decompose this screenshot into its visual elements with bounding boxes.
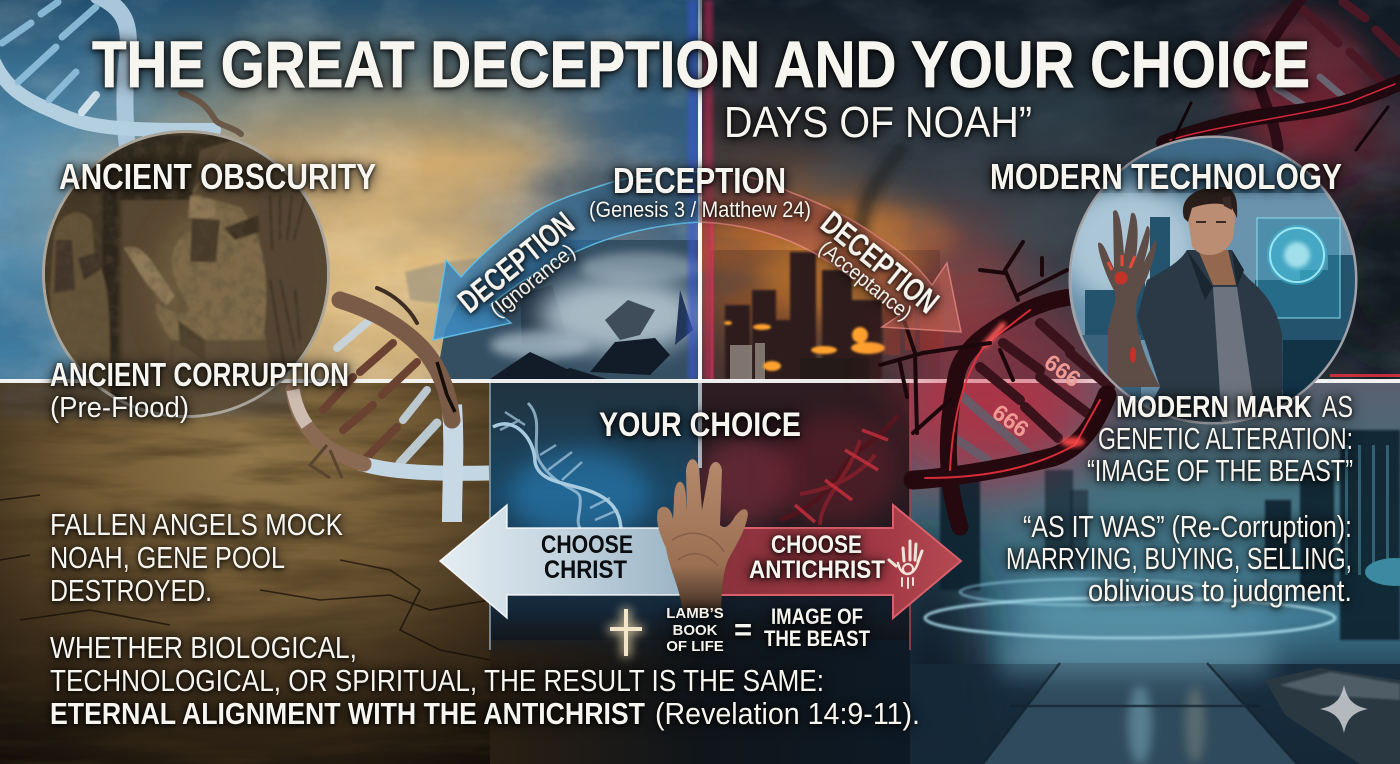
center vertical divider — [688, 0, 713, 380]
heading: deception: DECEPTION — [613, 160, 786, 201]
floor — [910, 664, 1400, 764]
smoke plume — [862, 145, 905, 232]
red DNA 666 labels: 666 — [1040, 349, 1086, 392]
icon: sparkle — [1320, 685, 1368, 733]
text: eternal alignment — [50, 630, 920, 731]
text: fallen angels: NOAH, GENE POOL — [50, 540, 285, 575]
text: eternal alignment: (Revelation 14:9-11). — [655, 696, 920, 731]
icon: cross — [608, 608, 643, 657]
label: deception: DECEPTION — [451, 205, 581, 320]
heading: your choice: YOUR CHOICE — [599, 406, 801, 444]
text: modern mark: MODERN MARK — [1116, 389, 1312, 424]
text: modern mark — [1087, 389, 1353, 488]
arrow: deception ignorance — [433, 172, 700, 340]
label: choose christ: CHOOSE — [541, 531, 633, 559]
horizontal divider — [0, 374, 1400, 383]
shirt — [1213, 287, 1253, 422]
thorned red DNA top right — [1164, 0, 1400, 150]
label: choose christ: CHRIST — [544, 556, 627, 584]
text: eternal alignment: TECHNOLOGICAL, OR SPIRITUAL, THE RESULT IS THE SAME: — [50, 663, 824, 698]
bottom center backdrop — [490, 640, 910, 764]
equals sign: = — [734, 612, 752, 647]
background: desert quadrant — [0, 380, 490, 764]
label: lamb's book of life: LAMB’S — [666, 605, 724, 622]
strand B — [948, 297, 1072, 527]
label: acceptance: (Acceptance) — [814, 237, 916, 325]
rungs — [980, 323, 1110, 438]
scripture reference: (Genesis 3 / Matthew 24) — [589, 197, 811, 222]
thorned red DNA helix — [880, 242, 1110, 527]
label: choose antichrist: CHOOSE — [771, 531, 862, 559]
rubble — [1265, 668, 1400, 764]
label: lamb's book of life — [666, 605, 724, 655]
arrow: choose christ — [440, 505, 680, 618]
heading: ancient obscurity: ANCIENT OBSCURITY — [59, 156, 376, 197]
relief: winged figure — [156, 158, 268, 414]
dome — [1365, 558, 1400, 586]
fossil horn on circle — [181, 93, 241, 134]
text: ancient corruption: ANCIENT CORRUPTION — [50, 356, 349, 393]
skyline — [940, 430, 1400, 640]
text: as it was: oblivious to judgment. — [1088, 573, 1352, 608]
text: eternal alignment: WHETHER BIOLOGICAL, — [50, 630, 357, 665]
glowing veins — [925, 310, 1100, 478]
label: deception: DECEPTION — [814, 204, 946, 320]
label: image of the beast: THE BEAST — [764, 626, 870, 651]
relief: wing — [260, 222, 287, 339]
text: as it was — [1006, 509, 1352, 608]
thorns — [880, 242, 1067, 433]
label: choose antichrist: ANTICHRIST — [749, 556, 885, 584]
arrow: choose antichrist — [720, 505, 961, 618]
panel: your choice — [440, 383, 961, 658]
text: fallen angels: FALLEN ANGELS MOCK — [50, 507, 343, 542]
panel background red — [700, 383, 910, 658]
brown rungs — [323, 343, 417, 457]
label: choose antichrist — [749, 531, 885, 584]
text: fallen angels: DESTROYED. — [50, 573, 212, 608]
thick strand — [452, 405, 453, 522]
background: ancient sky quadrant — [0, 0, 730, 390]
label: image of the beast: IMAGE OF — [771, 604, 863, 629]
label: lamb's book of life: OF LIFE — [666, 638, 724, 655]
arrow: deception acceptance — [700, 172, 961, 332]
strand A — [913, 395, 1107, 480]
red DNA 666 labels — [988, 349, 1086, 442]
relief: left figure — [50, 213, 110, 420]
text: eternal alignment: ETERNAL ALIGNMENT WITH THE ANTICHRIST — [50, 696, 645, 731]
icon: thorned red DNA — [770, 415, 900, 525]
jacket — [1137, 250, 1283, 425]
icon: blue DNA — [493, 403, 650, 540]
text: ancient corruption — [50, 356, 349, 424]
flood scene — [405, 228, 700, 380]
DNA helix top left — [0, 0, 214, 143]
circle: modern man — [1060, 137, 1363, 425]
mutated hand — [1098, 210, 1160, 387]
circle: ancient relief — [40, 130, 345, 420]
icon: hand raised — [657, 459, 748, 612]
burning city scene — [710, 220, 944, 380]
panel background blue — [490, 383, 700, 658]
background: modern storm quadrant — [680, 0, 1400, 380]
label: image of the beast — [764, 604, 870, 651]
red DNA 666 labels: 666 — [988, 399, 1034, 442]
icon: marked hand — [889, 541, 922, 588]
text: fallen angels — [50, 507, 343, 608]
subtitle: DAYS OF NOAH” — [724, 98, 1032, 147]
degraded DNA helix — [293, 288, 489, 522]
skyline — [1085, 217, 1358, 390]
lower strand — [360, 463, 489, 473]
holographic rings — [925, 579, 1335, 638]
white rungs — [337, 320, 437, 463]
label: ignorance: (Ignorance) — [486, 240, 580, 322]
text: ancient corruption: (Pre-Flood) — [50, 392, 189, 424]
neck and head — [1198, 250, 1236, 285]
label: lamb's book of life: BOOK — [672, 622, 718, 639]
label: choose christ — [541, 531, 633, 584]
background: future city quadrant — [910, 383, 1400, 764]
text: modern mark: AS — [1322, 389, 1353, 424]
